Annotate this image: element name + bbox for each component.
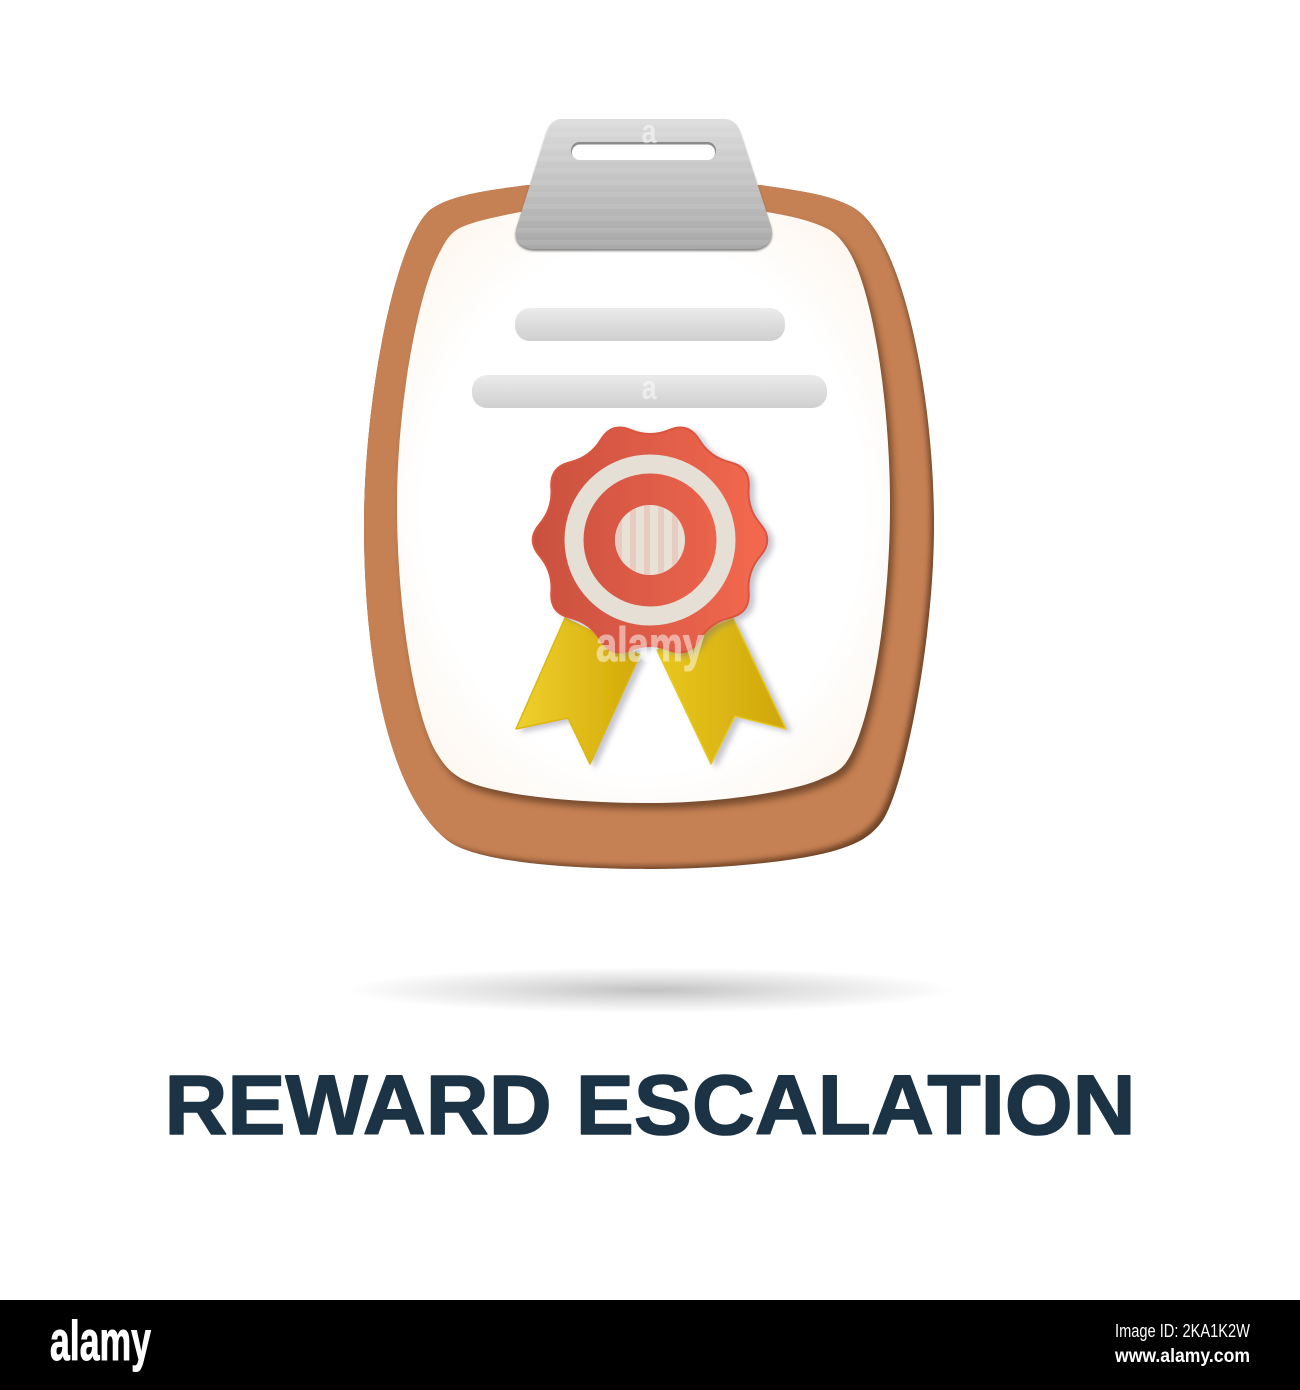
watermark: letter on clip: a: [642, 113, 657, 151]
text line 2: [472, 375, 827, 408]
image id: Image ID: 2KA1K2W: [1115, 1321, 1250, 1341]
title: REWARD ESCALATION: [164, 1058, 1136, 1152]
watermark: letter on line: a: [642, 369, 657, 407]
icon: floor shadow: [345, 967, 955, 1013]
footer logo: alamy: [50, 1309, 151, 1372]
rosette seal: [533, 428, 767, 652]
clip: [516, 119, 772, 249]
clipboard board: [357, 178, 940, 872]
icon: clipboard with certificate: [357, 113, 940, 872]
paper sheet: [397, 212, 890, 803]
footer bar: [0, 1300, 1300, 1390]
text line 1: [515, 308, 785, 341]
watermark: alamy on seal: alamy: [596, 619, 704, 672]
site url: www.alamy.com: [1114, 1346, 1250, 1367]
ribbon tails: [516, 618, 786, 764]
